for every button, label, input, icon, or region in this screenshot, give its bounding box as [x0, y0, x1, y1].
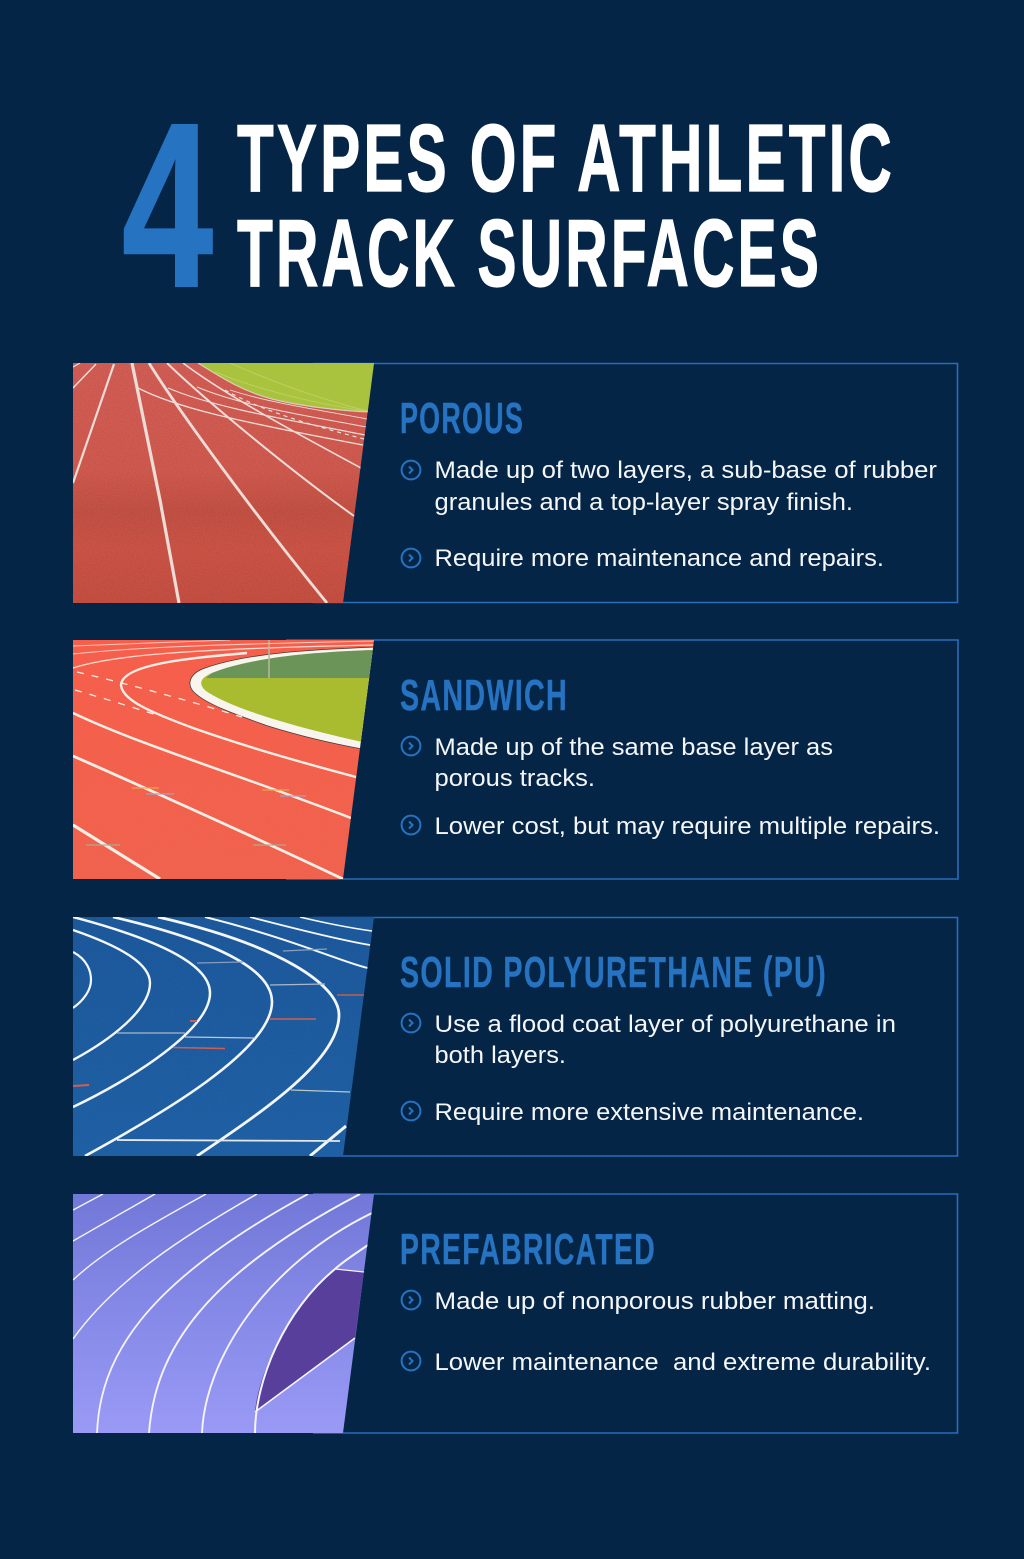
- bullet 1: both layers.: [434, 1042, 566, 1069]
- bullet 1: Made up of nonporous rubber matting.: [434, 1288, 875, 1315]
- bullet 2: Lower cost, but may require multiple repairs.: [434, 813, 940, 840]
- icon: chevron circle: [402, 1352, 420, 1370]
- icon: chevron circle: [402, 816, 420, 834]
- bullet 1: Made up of two layers, a sub-base of rubber: [434, 457, 937, 484]
- bullet 2: Require more extensive maintenance.: [434, 1099, 864, 1126]
- bullet 1: granules and a top-layer spray finish.: [434, 489, 853, 516]
- heading: PREFABRICATED: [400, 1225, 656, 1274]
- title number: 4: [122, 74, 213, 336]
- photo: purple prefabricated track: [73, 1194, 375, 1434]
- icon: chevron circle: [402, 737, 420, 755]
- bullet 2: Require more maintenance and repairs.: [434, 545, 884, 572]
- panel frame: [313, 1194, 958, 1433]
- panel frame: [313, 364, 958, 602]
- title: [122, 74, 895, 336]
- bullet 1: porous tracks.: [434, 765, 595, 792]
- panel: prefabricated: [73, 1194, 958, 1434]
- icon: chevron circle: [402, 1102, 420, 1120]
- panel: sandwich: [73, 640, 958, 880]
- panel: solid polyurethane: [73, 917, 958, 1157]
- icon: chevron circle: [402, 549, 420, 567]
- panel: porous: [73, 363, 958, 603]
- photo: blue polyurethane track: [73, 917, 375, 1157]
- icon: chevron circle: [402, 461, 420, 479]
- icon: chevron circle: [402, 1014, 420, 1032]
- bullet 2: Lower maintenance and extreme durability.: [434, 1349, 931, 1376]
- heading: SANDWICH: [400, 671, 568, 720]
- bullet 1: [402, 457, 937, 516]
- photo: orange sandwich track: [73, 640, 380, 880]
- bullet 1: Made up of the same base layer as: [434, 734, 833, 761]
- bullet 1: [402, 734, 833, 792]
- panel frame: [286, 640, 958, 879]
- bullet 1: Use a flood coat layer of polyurethane in: [434, 1011, 896, 1038]
- bullet 1: [402, 1011, 896, 1069]
- panel frame: [313, 918, 958, 1156]
- icon: chevron circle: [402, 1291, 420, 1309]
- photo: red porous track: [73, 363, 380, 603]
- heading: POROUS: [400, 394, 524, 443]
